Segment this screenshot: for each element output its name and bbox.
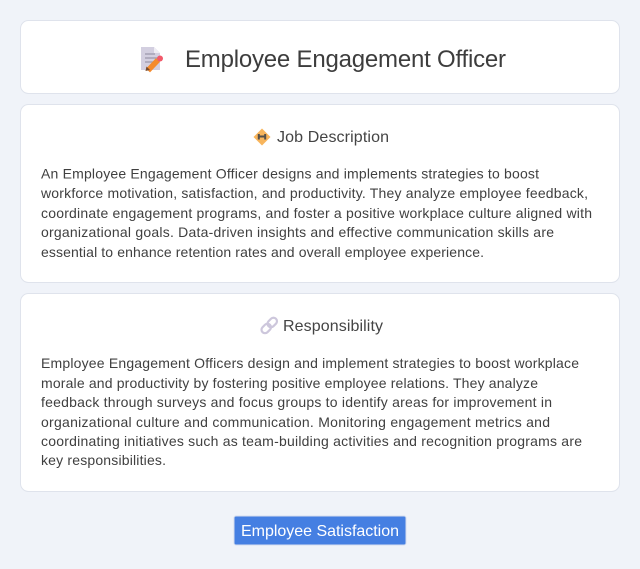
title text: Employee Engagement Officer [185,46,506,73]
job description text: organizational goals. Data-driven insights and effective communication skills are [41,224,554,240]
panel: title [20,20,620,94]
responsibility text: morale and productivity by fostering positive employee relations. They analyze [41,375,538,391]
responsibility text [41,355,582,468]
icon: diamond sign [254,128,270,146]
panel: responsibility [20,294,620,492]
icon: document with pencil [141,47,163,71]
responsibility text: Employee Engagement Officers design and implement strategies to boost workplace [41,355,579,371]
job description text: essential to enhance retention rates and overall employee experience. [41,244,484,260]
button: employee satisfaction: Employee Satisfaction [241,523,399,540]
responsibility text: key responsibilities. [41,452,166,468]
heading: job description: Job Description [277,129,389,146]
job description text: workforce motivation, satisfaction, and productivity. They analyze employee feedback, [40,185,588,201]
job description text: An Employee Engagement Officer designs and implements strategies to boost [41,166,539,182]
heading: responsibility: Responsibility [283,318,383,335]
job description text [40,166,592,260]
responsibility text: organizational culture and communication. Monitoring engagement metrics and [41,414,550,430]
job description text: coordinate engagement programs, and foster a positive workplace culture aligned with [41,205,592,221]
responsibility text: coordinating initiatives such as team-building activities and recognition programs are [41,433,582,449]
panel: job description [20,104,620,282]
responsibility text: feedback through surveys and focus groups to identify areas for improvement in [41,394,552,410]
button: employee satisfaction [234,516,406,545]
icon: chain link [260,316,278,335]
